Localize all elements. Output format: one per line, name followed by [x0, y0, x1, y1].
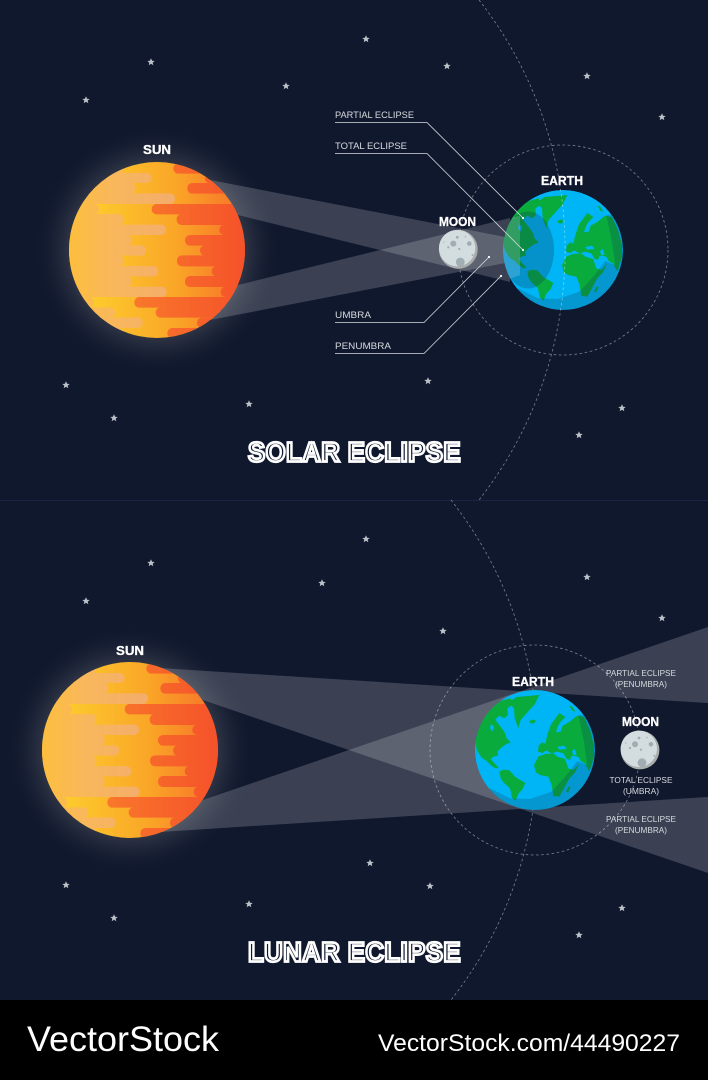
panel: lunar eclipse: [5, 500, 708, 1000]
label: sun: SUN: [143, 143, 171, 157]
light beams: lunar: [160, 627, 708, 873]
orbit: moon around the earth: [458, 145, 668, 355]
stars: solar panel: [62, 35, 666, 438]
sun glow: solar: [32, 125, 282, 375]
watermark bar: [0, 1000, 708, 1080]
title: lunar eclipse: LUNAR ECLIPSE: [248, 937, 461, 968]
callout: penumbra: [335, 275, 502, 354]
caption: lower partial eclipse: [606, 814, 676, 835]
caption: lower partial eclipse: PARTIAL ECLIPSE: [606, 814, 676, 824]
umbra shadow on earth: [501, 212, 554, 288]
caption: upper partial eclipse: (PENUMBRA): [615, 679, 667, 689]
callout: umbra: UMBRA: [335, 310, 372, 321]
callout: total eclipse: [335, 141, 524, 251]
callout: partial eclipse: PARTIAL ECLIPSE: [335, 110, 414, 121]
caption: total eclipse: [610, 775, 673, 796]
callout: penumbra: PENUMBRA: [335, 341, 392, 352]
watermark: url: VectorStock.com/44490227: [378, 1030, 680, 1057]
label: earth: EARTH: [512, 675, 554, 689]
caption: upper partial eclipse: PARTIAL ECLIPSE: [606, 668, 676, 678]
earth shadow: umbra behind earth: [535, 692, 708, 808]
moon: solar: [439, 230, 478, 269]
light beams: solar: [205, 179, 510, 321]
label: moon: MOON: [622, 715, 659, 729]
orbit: earth around the sun: [451, 500, 537, 1000]
caption: total eclipse: TOTAL ECLIPSE: [610, 775, 673, 785]
orbit: moon around the earth: [430, 645, 640, 855]
label: moon: MOON: [439, 215, 476, 229]
callout: partial eclipse: [335, 110, 524, 219]
caption: total eclipse: (UMBRA): [623, 786, 659, 796]
callout: total eclipse: TOTAL ECLIPSE: [335, 141, 407, 152]
sun: solar: [63, 160, 257, 340]
panel: solar eclipse: [32, 0, 668, 500]
sun: lunar: [36, 660, 230, 840]
label: sun: SUN: [116, 644, 144, 658]
earth: lunar: [475, 690, 603, 818]
orbit: earth around the sun: [479, 0, 565, 500]
title: solar eclipse: SOLAR ECLIPSE: [248, 437, 461, 468]
caption: upper partial eclipse: [606, 668, 676, 689]
watermark: brand: VectorStock: [27, 1020, 220, 1059]
stars: lunar panel: [62, 535, 666, 938]
moon: lunar: [621, 731, 659, 769]
earth: solar: [503, 190, 623, 310]
sun glow: lunar: [5, 625, 255, 875]
callout: umbra: [335, 256, 490, 322]
caption: lower partial eclipse: (PENUMBRA): [615, 825, 667, 835]
label: earth: EARTH: [541, 174, 583, 188]
